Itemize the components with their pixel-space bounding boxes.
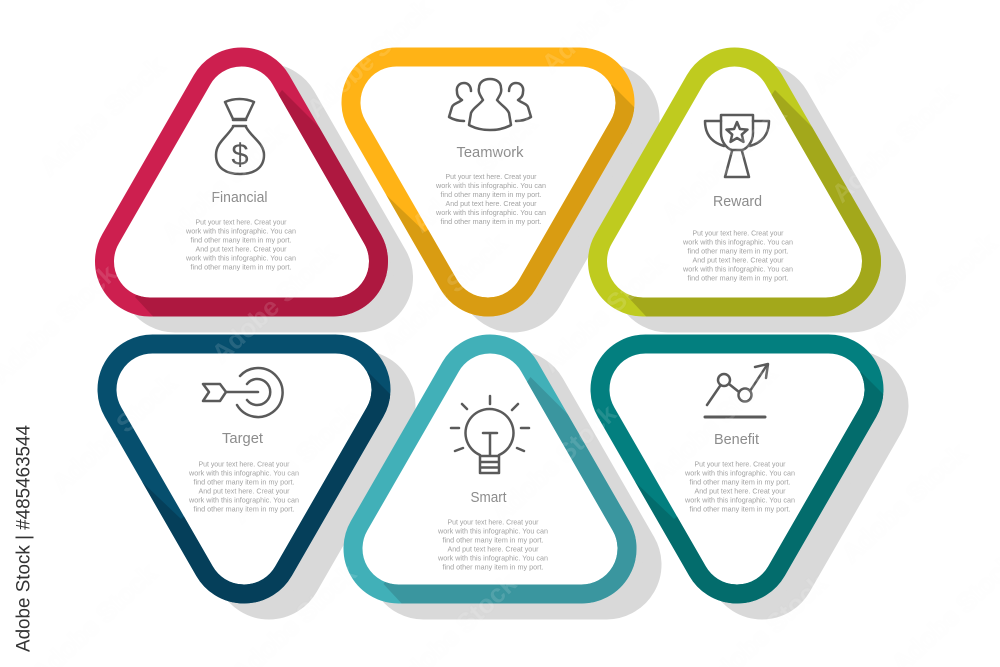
stock watermark pattern: Adobe Stock	[156, 118, 293, 249]
stock id side label: Adobe Stock | #485463544	[12, 425, 34, 652]
icon: money bag	[216, 99, 264, 174]
text block: Reward: work with this infographic. You can	[682, 264, 793, 274]
stock watermark pattern: Adobe Stock	[376, 228, 513, 359]
text block: Benefit	[684, 460, 795, 514]
text block: Benefit: find other many item in my port.	[690, 478, 790, 486]
text block: Target: And put text here. Creat your	[198, 486, 290, 496]
text block: Target	[188, 460, 299, 514]
text block: Reward	[682, 228, 793, 282]
text block: Teamwork: And put text here. Creat your	[446, 199, 537, 208]
text block: Smart: work with this infographic. You can	[437, 554, 548, 562]
stock watermark pattern: Adobe Stock	[656, 98, 793, 229]
text block: Financial: find other many item in my port.	[190, 262, 292, 272]
panel: Teamwork	[351, 57, 625, 307]
text block: Smart: find other many item in my port.	[442, 562, 544, 572]
stock watermark pattern: Adobe Stock	[226, 398, 363, 529]
text block: Benefit: find other many item in my port.	[690, 504, 790, 514]
stock watermark pattern: Adobe Stock	[34, 51, 171, 182]
heading: Teamwork: Teamwork	[456, 144, 524, 161]
text block: Smart: work with this infographic. You can	[437, 526, 548, 536]
text block: Smart: Put your text here. Creat your	[448, 518, 539, 526]
heading: Target: Target	[222, 430, 264, 447]
text block: Financial: work with this infographic. You can	[185, 226, 296, 236]
text block: Reward: And put text here. Creat your	[692, 256, 784, 264]
text block: Smart: And put text here. Creat your	[448, 544, 539, 554]
text block: Target: Put your text here. Creat your	[198, 460, 290, 468]
panel: Target	[107, 344, 381, 594]
stock watermark pattern: Adobe Stock	[406, 108, 543, 239]
stock watermark pattern: Adobe Stock	[646, 358, 783, 489]
stock watermark pattern: Adobe Stock	[206, 238, 343, 369]
text block: Benefit: work with this infographic. You can	[684, 496, 795, 504]
ring: Target	[107, 344, 381, 594]
text block: Financial: work with this infographic. You can	[185, 254, 296, 262]
heading: Reward: Reward	[713, 193, 762, 210]
text block: Teamwork: work with this infographic. You can	[435, 181, 546, 190]
text block: Target: work with this infographic. You can	[188, 496, 299, 504]
text block: Reward: find other many item in my port.	[688, 246, 788, 256]
stock watermark pattern: Adobe Stock	[486, 398, 623, 529]
icon: light bulb	[451, 396, 529, 473]
icon: team	[449, 79, 531, 130]
ring: Teamwork	[351, 57, 625, 307]
ring: Benefit	[600, 344, 874, 594]
panel: Reward	[598, 57, 871, 307]
text block: Teamwork: work with this infographic. You can	[435, 208, 546, 217]
text block: Benefit: work with this infographic. You can	[684, 468, 795, 478]
text block: Reward: work with this infographic. You can	[682, 238, 793, 246]
icon: growth chart	[705, 364, 768, 417]
ring: Financial	[105, 57, 378, 307]
panel drop shadows	[130, 73, 899, 610]
text block: Smart	[437, 518, 548, 572]
icon: money bag: $	[231, 137, 249, 172]
text block: Teamwork	[435, 172, 546, 226]
heading: Smart: Smart	[470, 489, 507, 506]
ring: Reward	[598, 57, 871, 307]
icon: trophy	[705, 115, 769, 177]
text block: Financial: And put text here. Creat your	[196, 244, 287, 254]
text block: Target: work with this infographic. You can	[188, 468, 299, 478]
text block: Reward: find other many item in my port.	[688, 274, 788, 282]
heading: Financial: Financial	[212, 189, 268, 206]
panel: Financial	[105, 57, 378, 307]
text block: Target: find other many item in my port.	[194, 504, 294, 514]
text block: Financial	[185, 218, 296, 272]
stock watermark pattern: Adobe Stock	[536, 248, 673, 379]
stock watermark pattern: Adobe Stock	[826, 78, 963, 209]
text block: Teamwork: find other many item in my port.	[440, 190, 542, 199]
panel: Benefit	[600, 344, 874, 594]
text block: Benefit: And put text here. Creat your	[694, 486, 786, 496]
heading: Benefit: Benefit	[714, 431, 760, 448]
text block: Smart: find other many item in my port.	[442, 536, 544, 544]
icon: target with arrow	[203, 368, 283, 417]
text block: Reward: Put your text here. Creat your	[692, 228, 784, 238]
stock watermark pattern: Adobe Stock	[836, 438, 973, 569]
text block: Financial: Put your text here. Creat your	[196, 218, 287, 226]
text block: Target: find other many item in my port.	[194, 478, 294, 486]
text block: Financial: find other many item in my port.	[190, 236, 292, 244]
text block: Teamwork: Put your text here. Creat your	[446, 172, 537, 181]
text block: Teamwork: find other many item in my port.	[440, 217, 542, 226]
stock watermark pattern: Adobe Stock	[46, 368, 183, 499]
text block: Benefit: Put your text here. Creat your	[694, 460, 786, 468]
ring: Smart	[353, 344, 627, 594]
stock watermark pattern: Adobe Stock	[866, 228, 1000, 359]
panel: Smart	[353, 344, 627, 594]
